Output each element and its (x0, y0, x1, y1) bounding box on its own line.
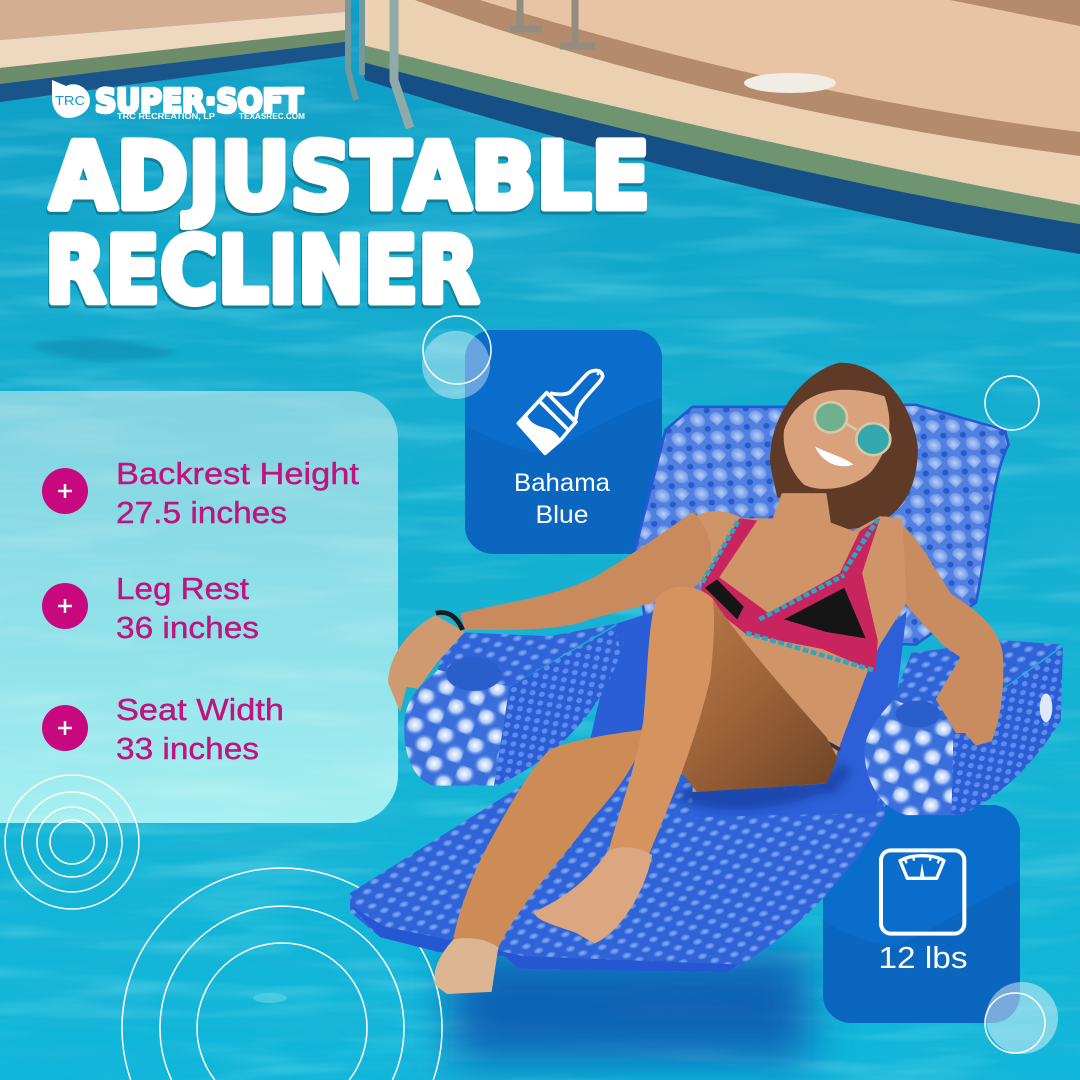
blue lounge float (350, 405, 1063, 972)
float shadow (450, 950, 810, 1062)
lower leg (454, 729, 648, 948)
hair (770, 363, 918, 531)
face (784, 390, 889, 489)
logo subtext right: TEXASREC.COM (239, 112, 305, 121)
torso (692, 493, 907, 792)
card: weight (823, 805, 1020, 1023)
raised foot (534, 847, 652, 943)
left hand (388, 615, 465, 712)
pool deck and edge (0, 0, 1080, 254)
logo wordmark: SUPER·SOFT (95, 82, 303, 120)
spec: backrest height: Backrest Height (116, 456, 359, 491)
colour label (514, 469, 610, 529)
decorative circle right (985, 376, 1039, 430)
wristband (436, 612, 463, 630)
card: colour (465, 330, 662, 554)
woman reclining (388, 363, 1003, 994)
logo mark: TRC (55, 93, 85, 108)
spec: backrest height (42, 456, 359, 530)
body shadow on seat (688, 767, 846, 804)
spec: seat width (42, 692, 284, 766)
spec: leg rest: Leg Rest (116, 571, 249, 606)
colour label: Blue (536, 501, 588, 529)
right arm (884, 516, 1003, 746)
decorative concentric rings bottom (122, 868, 442, 1080)
icon: bathroom scale (881, 850, 964, 934)
float left armrest (404, 624, 620, 787)
colour label: Bahama (514, 469, 610, 497)
smile (815, 447, 853, 466)
sunglasses (815, 402, 890, 455)
spec: seat width: Seat Width (116, 692, 284, 727)
spec: backrest height: 27.5 inches (116, 495, 287, 530)
raised leg thigh (648, 586, 838, 792)
logo (52, 80, 305, 121)
icon: paint brush (517, 370, 603, 454)
bikini top (701, 518, 880, 672)
float right armrest (864, 640, 1063, 815)
lower foot (434, 938, 498, 994)
decorative concentric rings left (5, 775, 139, 909)
panel: specifications (0, 391, 398, 823)
spec: seat width: 33 inches (116, 731, 259, 766)
left arm (460, 512, 711, 630)
float seat (350, 619, 898, 972)
title line 1: ADJUSTABLE (50, 123, 650, 230)
spec: leg rest (42, 571, 259, 645)
decorative circle bottom right (985, 982, 1058, 1054)
raised leg shin (608, 586, 714, 868)
weight label: 12 lbs (878, 940, 968, 975)
logo subtext left: TRC RECREATION, LP (117, 112, 216, 121)
float backrest (634, 405, 1009, 645)
decorative circle top centre (422, 316, 491, 399)
spec: leg rest: 36 inches (116, 610, 259, 645)
title (45, 123, 650, 324)
title line 2: RECLINER (45, 217, 479, 324)
bikini bottom string (809, 733, 840, 750)
logo mark (52, 80, 90, 118)
